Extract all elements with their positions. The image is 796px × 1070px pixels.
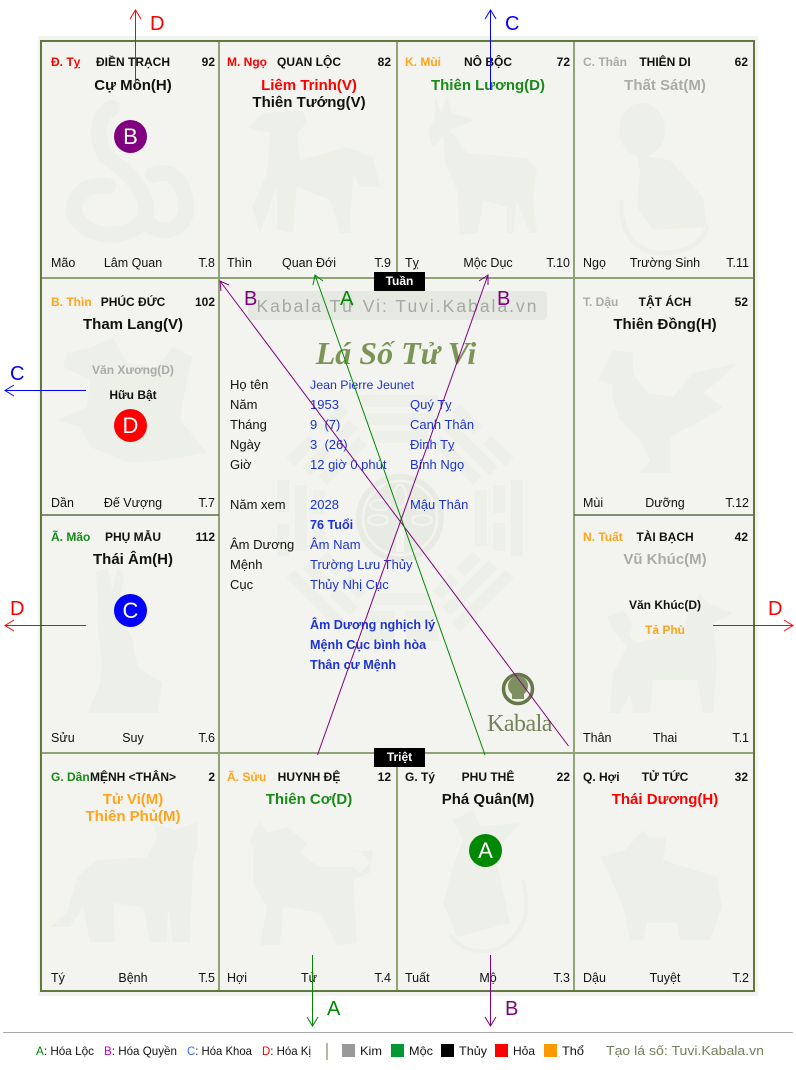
palace: Quan Lộc: T.9: [374, 256, 391, 270]
watermark: dog: [607, 593, 733, 713]
arrow: C left: [5, 363, 86, 396]
watermark: rat: [443, 810, 526, 951]
birth information table: 12 giờ 0 phút: [310, 457, 386, 472]
legend: elements: Mộc: [409, 1044, 433, 1058]
palace: Thiên Di: Thất Sát(M): [624, 77, 706, 94]
palace: Nô Bộc: K. Mùi: [405, 55, 441, 69]
birth information table: Cục: [230, 577, 253, 592]
legend divider: [326, 1043, 328, 1060]
palace: Phụ Mẫu: Thái Âm(H): [93, 551, 173, 568]
arrow: A diagonal: A: [340, 288, 354, 310]
birth information table: Jean Pierre Jeunet: [310, 378, 414, 392]
star marker A: [469, 834, 502, 867]
watermark: monkey: [619, 103, 707, 253]
palace: Tử Tức: Q. Hợi: [583, 770, 620, 784]
legend: transformations: C: Hóa Khoa: [187, 1044, 252, 1058]
palace: Phụ Mẫu: T.6: [198, 731, 215, 745]
watermark banner: [248, 291, 547, 320]
palace: Tử Tức: TỬ TỨC: [642, 770, 688, 784]
watermark: rooster: [598, 350, 737, 473]
birth information table: 3 (26): [310, 437, 348, 452]
palace: Tài Bạch: Thân: [583, 731, 612, 745]
star marker B: [114, 120, 147, 153]
footer legend: [36, 1043, 764, 1060]
arrow: A diagonal: [313, 275, 485, 755]
palace: Quan Lộc: M. Ngọ: [227, 55, 267, 69]
Triệt marker: [374, 748, 425, 767]
palace: Tử Tức: [583, 770, 749, 985]
arrow: D right: [713, 598, 793, 631]
arrow: A bottom: A: [327, 998, 341, 1020]
legend: transformations: B: Hóa Quyền: [104, 1044, 177, 1058]
palace: Tật Ách: 52: [735, 295, 748, 309]
legend: elements: Kim: [360, 1044, 382, 1058]
birth information table: 2028: [310, 497, 339, 512]
palace: Quan Lộc: Quan Đới: [282, 256, 336, 270]
palace: Mệnh: [51, 770, 215, 985]
palace: Phu Thê: Tuất: [405, 971, 430, 985]
palace: Huynh Đệ: T.4: [374, 971, 391, 985]
palace: Tử Tức: 32: [735, 770, 748, 784]
arrow: B bottom: [485, 955, 518, 1026]
palace: Mệnh: Bệnh: [118, 971, 148, 985]
palace: Điền Trạch: [51, 55, 215, 270]
palace: Tật Ách: Thiên Đồng(H): [613, 316, 717, 333]
palace: Tài Bạch: Vũ Khúc(M): [623, 551, 707, 568]
palace: Phụ Mẫu: Sửu: [51, 731, 75, 745]
palace: Tật Ách: [583, 295, 749, 510]
birth information table: Giờ: [230, 457, 252, 472]
palace: Phu Thê: PHU THÊ: [462, 770, 514, 784]
palace: Tật Ách: Mùi: [583, 496, 603, 510]
arrow: C top: [485, 10, 519, 90]
arrow: D right: D: [768, 598, 782, 620]
palace: Phu Thê: Phá Quân(M): [442, 791, 534, 808]
palace: Mệnh: T.5: [198, 971, 215, 985]
palace: Quan Lộc: Liêm Trinh(V): [261, 77, 357, 94]
legend: site link: Tạo lá số: Tuvi.Kabala.vn: [606, 1043, 764, 1058]
arrow: B diagonal to top left: [220, 281, 568, 746]
arrow: B diagonal to top left: B: [244, 288, 257, 310]
birth information table: Thân cư Mệnh: [310, 658, 396, 672]
palace: Huynh Đệ: HUYNH ĐỆ: [278, 770, 340, 784]
palace: Phu Thê: 22: [557, 770, 570, 784]
birth information table: Năm xem: [230, 497, 286, 512]
birth information table: Đinh Tỵ: [410, 437, 455, 452]
palace: Tài Bạch: [583, 530, 749, 745]
watermark: rabbit: [88, 568, 162, 713]
palace: Phu Thê: T.3: [553, 971, 570, 985]
palace: Mệnh: Tử Vi(M): [103, 791, 163, 808]
legend: transformations: A: Hóa Lộc: [36, 1044, 94, 1058]
palace: Tử Tức: Thái Dương(H): [612, 791, 718, 808]
arrow: A bottom: [307, 955, 341, 1026]
palace: Tật Ách: Dưỡng: [645, 496, 685, 510]
logo: Kabala: Kabala: [487, 711, 552, 737]
palace: Nô Bộc: T.10: [546, 256, 570, 270]
palace: Điền Trạch: Mão: [51, 256, 75, 270]
palace: Huynh Đệ: [227, 770, 391, 985]
palace: Thiên Di: C. Thân: [583, 55, 627, 69]
Triệt marker: Triệt: [387, 750, 412, 764]
palace: Phúc Đức: Tham Lang(V): [83, 316, 183, 333]
watermark: bagua: [277, 395, 523, 641]
palace: Huynh Đệ: Hợi: [227, 971, 247, 985]
palace: Huynh Đệ: 12: [378, 770, 391, 784]
arrow: B diagonal to top right: [318, 275, 510, 755]
birth information table: Canh Thân: [410, 417, 474, 432]
palace: Tài Bạch: 42: [735, 530, 748, 544]
watermark: snake: [74, 108, 186, 235]
legend: elements: Thủy: [459, 1044, 487, 1058]
palace: Điền Trạch: 92: [202, 55, 215, 69]
watermark: horse: [248, 110, 380, 233]
palace: Điền Trạch: Cự Môn(H): [94, 77, 172, 94]
palace: Phúc Đức: Dần: [51, 496, 74, 510]
palace: Nô Bộc: [405, 55, 570, 270]
palace: Thiên Di: Trường Sinh: [630, 256, 700, 270]
palace: Thiên Di: [583, 55, 749, 270]
palace: Điền Trạch: Đ. Tỵ: [51, 55, 80, 69]
birth information table: Họ tên: [230, 377, 268, 392]
palace: Phụ Mẫu: Ã. Mão: [51, 530, 90, 544]
arrow: D top: D: [150, 13, 164, 35]
watermark: tiger: [50, 822, 198, 942]
birth information table: Thủy Nhị Cục: [310, 577, 389, 592]
arrow: D left: [5, 598, 86, 631]
palace: Phu Thê: Mộ: [479, 971, 497, 985]
palace: Tài Bạch: Thai: [653, 731, 677, 745]
palace: Tài Bạch: Tả Phù: [645, 623, 685, 637]
legend: elements: Hỏa: [513, 1044, 535, 1058]
palace: Phúc Đức: B. Thìn: [51, 295, 92, 309]
arrow: D left: D: [10, 598, 24, 620]
star marker B: B: [123, 124, 138, 149]
palace: Nô Bộc: NÔ BỘC: [464, 55, 512, 69]
palace: Điền Trạch: Lâm Quan: [104, 256, 162, 270]
palace: Huynh Đệ: Ã. Sửu: [227, 770, 266, 784]
palace: Quan Lộc: [227, 55, 391, 270]
palace: Quan Lộc: QUAN LỘC: [277, 55, 341, 69]
palace: Nô Bộc: 72: [557, 55, 570, 69]
palace: Tử Tức: Tuyệt: [650, 971, 680, 985]
birth information table: Trường Lưu Thủy: [310, 557, 413, 572]
watermark: goat: [428, 95, 537, 235]
birth information table: Mậu Thân: [410, 497, 468, 512]
star marker C: [114, 594, 147, 627]
palace: Phụ Mẫu: 112: [196, 530, 215, 544]
arrow: C top: C: [505, 13, 519, 35]
palace: Tử Tức: T.2: [732, 971, 749, 985]
palace: Mệnh: G. Dần: [51, 770, 90, 784]
birth information table: Tháng: [230, 417, 267, 432]
palace: Tật Ách: T. Dậu: [583, 295, 618, 309]
palace: Tử Tức: Dậu: [583, 971, 606, 985]
palace: Phúc Đức: 102: [195, 295, 215, 309]
palace: Thiên Di: Ngọ: [583, 256, 606, 270]
palace: Quan Lộc: Thìn: [227, 256, 252, 270]
palace: Thiên Di: 62: [735, 55, 748, 69]
birth information table: Mệnh Cục bình hòa: [310, 638, 426, 652]
birth information table: Âm Nam: [310, 537, 361, 552]
birth information table: Mệnh: [230, 557, 263, 572]
title: Lá Số Tử Vi: Lá Số Tử Vi: [316, 335, 476, 371]
palace: Phúc Đức: Đế Vượng: [104, 496, 162, 510]
birth information table: Âm Dương: [230, 537, 294, 552]
palace: Tài Bạch: N. Tuất: [583, 530, 623, 544]
palace: Phúc Đức: PHÚC ĐỨC: [101, 295, 165, 309]
palace: Quan Lộc: Thiên Tướng(V): [252, 94, 366, 111]
palace: Huynh Đệ: Thiên Cơ(D): [266, 791, 352, 808]
footer divider: [3, 1032, 793, 1033]
palace: Tật Ách: T.12: [725, 496, 749, 510]
palace: Điền Trạch: ĐIỀN TRẠCH: [96, 55, 170, 69]
star marker A: A: [478, 838, 493, 863]
palace: Tài Bạch: T.1: [732, 731, 749, 745]
legend: elements: [342, 1044, 584, 1058]
palace: Mệnh: 2: [208, 770, 215, 784]
palace: Thiên Di: T.11: [726, 256, 749, 270]
palace: Phụ Mẫu: PHỤ MẪU: [105, 530, 161, 544]
birth information table: Năm: [230, 397, 257, 412]
palace: Phu Thê: [405, 770, 570, 985]
palace: Huynh Đệ: Tử: [301, 971, 317, 985]
birth information table: Âm Dương nghịch lý: [310, 618, 435, 632]
watermark: pig: [600, 830, 722, 940]
palace: Phụ Mẫu: Suy: [122, 731, 144, 745]
palace: Nô Bộc: Tỵ: [405, 256, 419, 270]
palace: Phúc Đức: Hữu Bật: [109, 388, 157, 402]
palace: Tật Ách: TẬT ÁCH: [639, 295, 691, 309]
birth information table: 9 (7): [310, 417, 340, 432]
palace: Phu Thê: G. Tý: [405, 770, 435, 784]
arrow: D top: [130, 10, 164, 90]
arrow: C left: C: [10, 363, 24, 385]
palace: Tài Bạch: TÀI BẠCH: [636, 530, 694, 544]
logo: Kabala: [487, 672, 552, 737]
legend: transformations: D: Hóa Kị: [262, 1044, 311, 1058]
Tuần marker: [374, 272, 425, 291]
watermark: dragon: [57, 337, 207, 463]
palace: Nô Bộc: Thiên Lương(D): [431, 77, 545, 94]
palace: Thiên Di: THIÊN DI: [639, 55, 691, 69]
palace: Mệnh: Thiên Phủ(M): [86, 808, 180, 825]
legend: transformations: [36, 1044, 311, 1058]
watermark: ox: [250, 820, 373, 945]
legend: elements: Thổ: [562, 1044, 584, 1058]
palace: Phúc Đức: Văn Xương(D): [92, 363, 174, 377]
birth information table: Quý Tỵ: [410, 397, 452, 412]
birth information table: 76 Tuổi: [310, 518, 353, 532]
birth information table: [230, 377, 474, 672]
palace: Mệnh: MỆNH <THÂN>: [90, 770, 176, 784]
arrow: B diagonal to top right: B: [497, 288, 510, 310]
palace: Phúc Đức: [51, 295, 215, 510]
birth information table: 1953: [310, 397, 339, 412]
palace: Điền Trạch: T.8: [198, 256, 215, 270]
birth information table: Ngày: [230, 437, 260, 452]
palace: Phụ Mẫu: [51, 530, 215, 745]
birth information table: Bính Ngọ: [410, 457, 464, 472]
palace: Mệnh: Tý: [51, 971, 65, 985]
star marker D: [114, 409, 147, 442]
palace: Quan Lộc: 82: [378, 55, 391, 69]
star marker D: D: [123, 413, 138, 438]
palace: Tài Bạch: Văn Khúc(D): [629, 598, 701, 612]
palace: Nô Bộc: Mộc Dục: [463, 256, 513, 270]
arrow: B bottom: B: [505, 998, 518, 1020]
palace: Phúc Đức: T.7: [198, 496, 215, 510]
star marker C: C: [123, 598, 138, 623]
Tuần marker: Tuần: [386, 274, 413, 288]
watermark banner: Kabala Tử Vi: Tuvi.Kabala.vn: [256, 296, 539, 316]
